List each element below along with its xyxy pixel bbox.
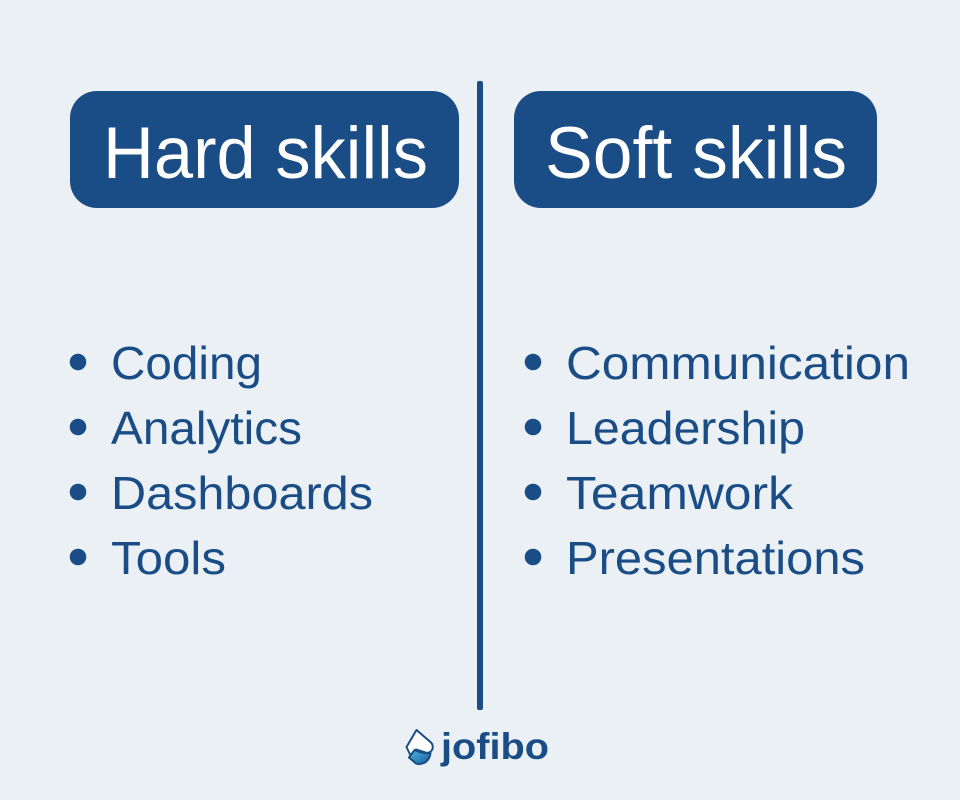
list: soft skills: Leadership xyxy=(566,402,805,454)
list: hard skills: Coding xyxy=(111,337,262,389)
list: hard skills xyxy=(70,337,373,584)
list: soft skills: Teamwork xyxy=(566,467,794,519)
list: soft skills: Communication xyxy=(566,337,910,389)
icon: logo mark xyxy=(406,730,433,764)
logo: jofibo: jofibo xyxy=(440,726,549,767)
panel: hard skills heading: Hard skills xyxy=(103,113,428,194)
panel: soft skills heading: Soft skills xyxy=(545,113,847,194)
panel: soft skills heading xyxy=(514,91,877,208)
list: hard skills: Tools xyxy=(111,532,226,584)
center divider xyxy=(477,81,483,710)
list: soft skills xyxy=(525,337,910,584)
panel: hard skills heading xyxy=(70,91,459,208)
list: hard skills: Analytics xyxy=(111,402,302,454)
list: soft skills: Presentations xyxy=(566,532,865,584)
list: hard skills: Dashboards xyxy=(111,467,373,519)
